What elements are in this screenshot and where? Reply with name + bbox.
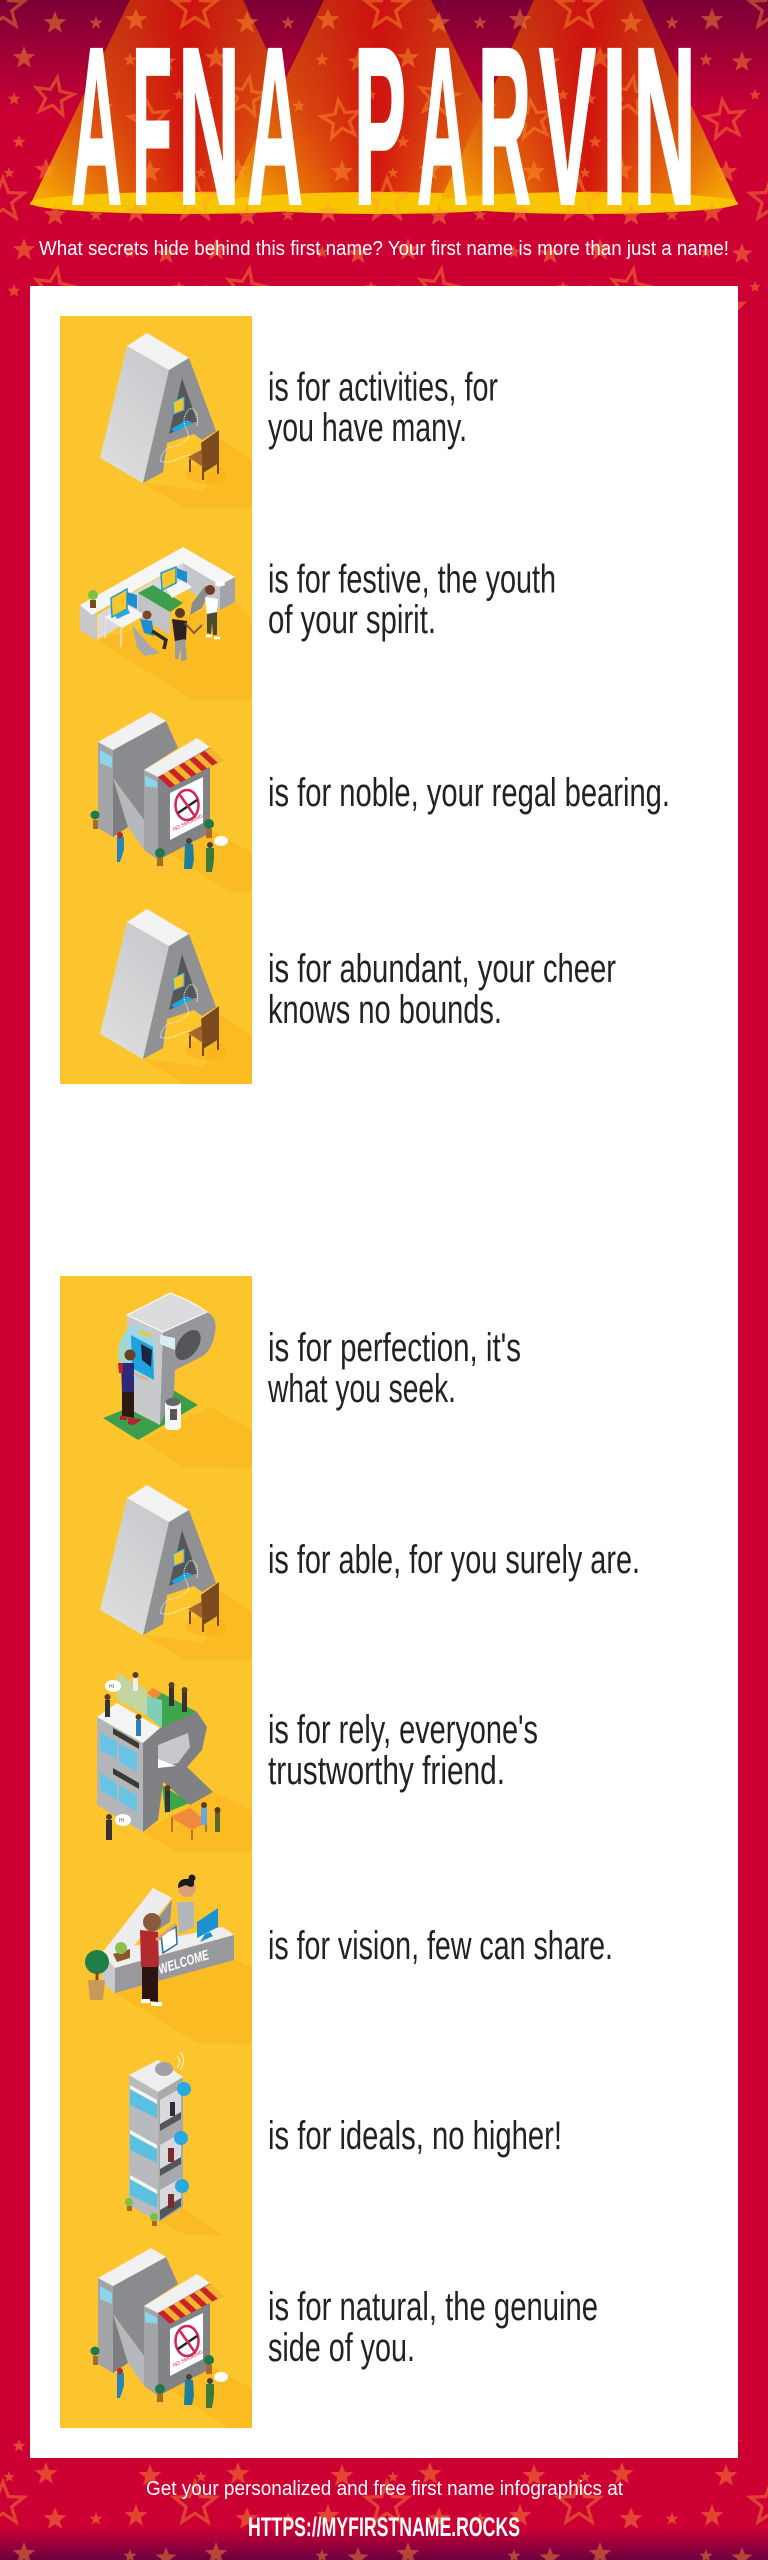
subtitle: What secrets hide behind this first name? Your first name is more than just a name! (39, 238, 729, 260)
title: N (178, 2, 240, 252)
text: A activities (268, 366, 498, 450)
text: F festive: is for festive, the youth (268, 558, 556, 602)
text: I ideals: is for ideals, no higher! (268, 2114, 562, 2158)
text: A abundant: knows no bounds. (268, 988, 502, 1032)
text: N natural: is for natural, the genuine (268, 2285, 598, 2329)
text: F festive (268, 558, 556, 642)
spotlight: left (30, 0, 342, 214)
icon: welcome desk letter V: WELCOME (156, 1946, 211, 1977)
text: A activities: you have many. (268, 406, 467, 450)
text: R rely: is for rely, everyone's (268, 1708, 538, 1752)
title: A (247, 2, 301, 252)
text: P perfection: what you seek. (267, 1367, 456, 1411)
icon: isometric office letter F (80, 547, 252, 700)
panel: first name tiles (60, 316, 252, 1084)
icon: isometric tower letter I (125, 2052, 225, 2236)
star pattern: header (0, 0, 768, 310)
text: N natural: side of you. (268, 2326, 415, 2370)
spotlight: centre (224, 0, 532, 214)
text: N natural (268, 2285, 598, 2370)
text: A activities: is for activities, for (268, 366, 498, 410)
text: R rely: trustworthy friend. (268, 1749, 505, 1793)
panel: white content (30, 286, 738, 2458)
icon: isometric letter A with chair (100, 1485, 252, 1660)
star pattern: footer (0, 2440, 768, 2560)
title: A (417, 2, 468, 252)
icon: isometric ATM letter P (103, 1293, 252, 1468)
icon: isometric letter A with chair (100, 909, 252, 1084)
title: R (478, 2, 531, 252)
title: P (354, 2, 406, 252)
icon: isometric building letter R (97, 1672, 252, 1852)
icon: isometric letter N with no-smoking sign (90, 2248, 252, 2428)
icon: isometric building letter R: HI (119, 1818, 124, 1824)
text: R rely (268, 1708, 538, 1793)
panel: last name tiles (60, 1276, 252, 2428)
title: I (602, 2, 627, 252)
title: A (71, 2, 122, 252)
text: F festive: of your spirit. (268, 598, 436, 642)
text: V vision: is for vision, few can share. (268, 1924, 613, 1968)
title: V (539, 2, 596, 252)
title: F (132, 2, 172, 252)
text: A abundant: is for abundant, your cheer (268, 947, 616, 991)
footer text: Get your personalized and free first name infographics at (146, 2478, 623, 2500)
icon: isometric building letter R: HI (109, 1684, 114, 1690)
spotlight: right (438, 0, 738, 214)
text: P perfection: is for perfection, it's (268, 1326, 521, 1370)
icon: isometric letter A with chair (100, 333, 252, 508)
icon: welcome desk letter V (85, 1874, 252, 2044)
text: P perfection (267, 1326, 521, 1411)
text: A abundant (268, 947, 616, 1032)
footer url: HTTPS://MYFIRSTNAME.ROCKS (248, 2512, 520, 2542)
icon: isometric letter N with no-smoking sign (90, 712, 252, 892)
